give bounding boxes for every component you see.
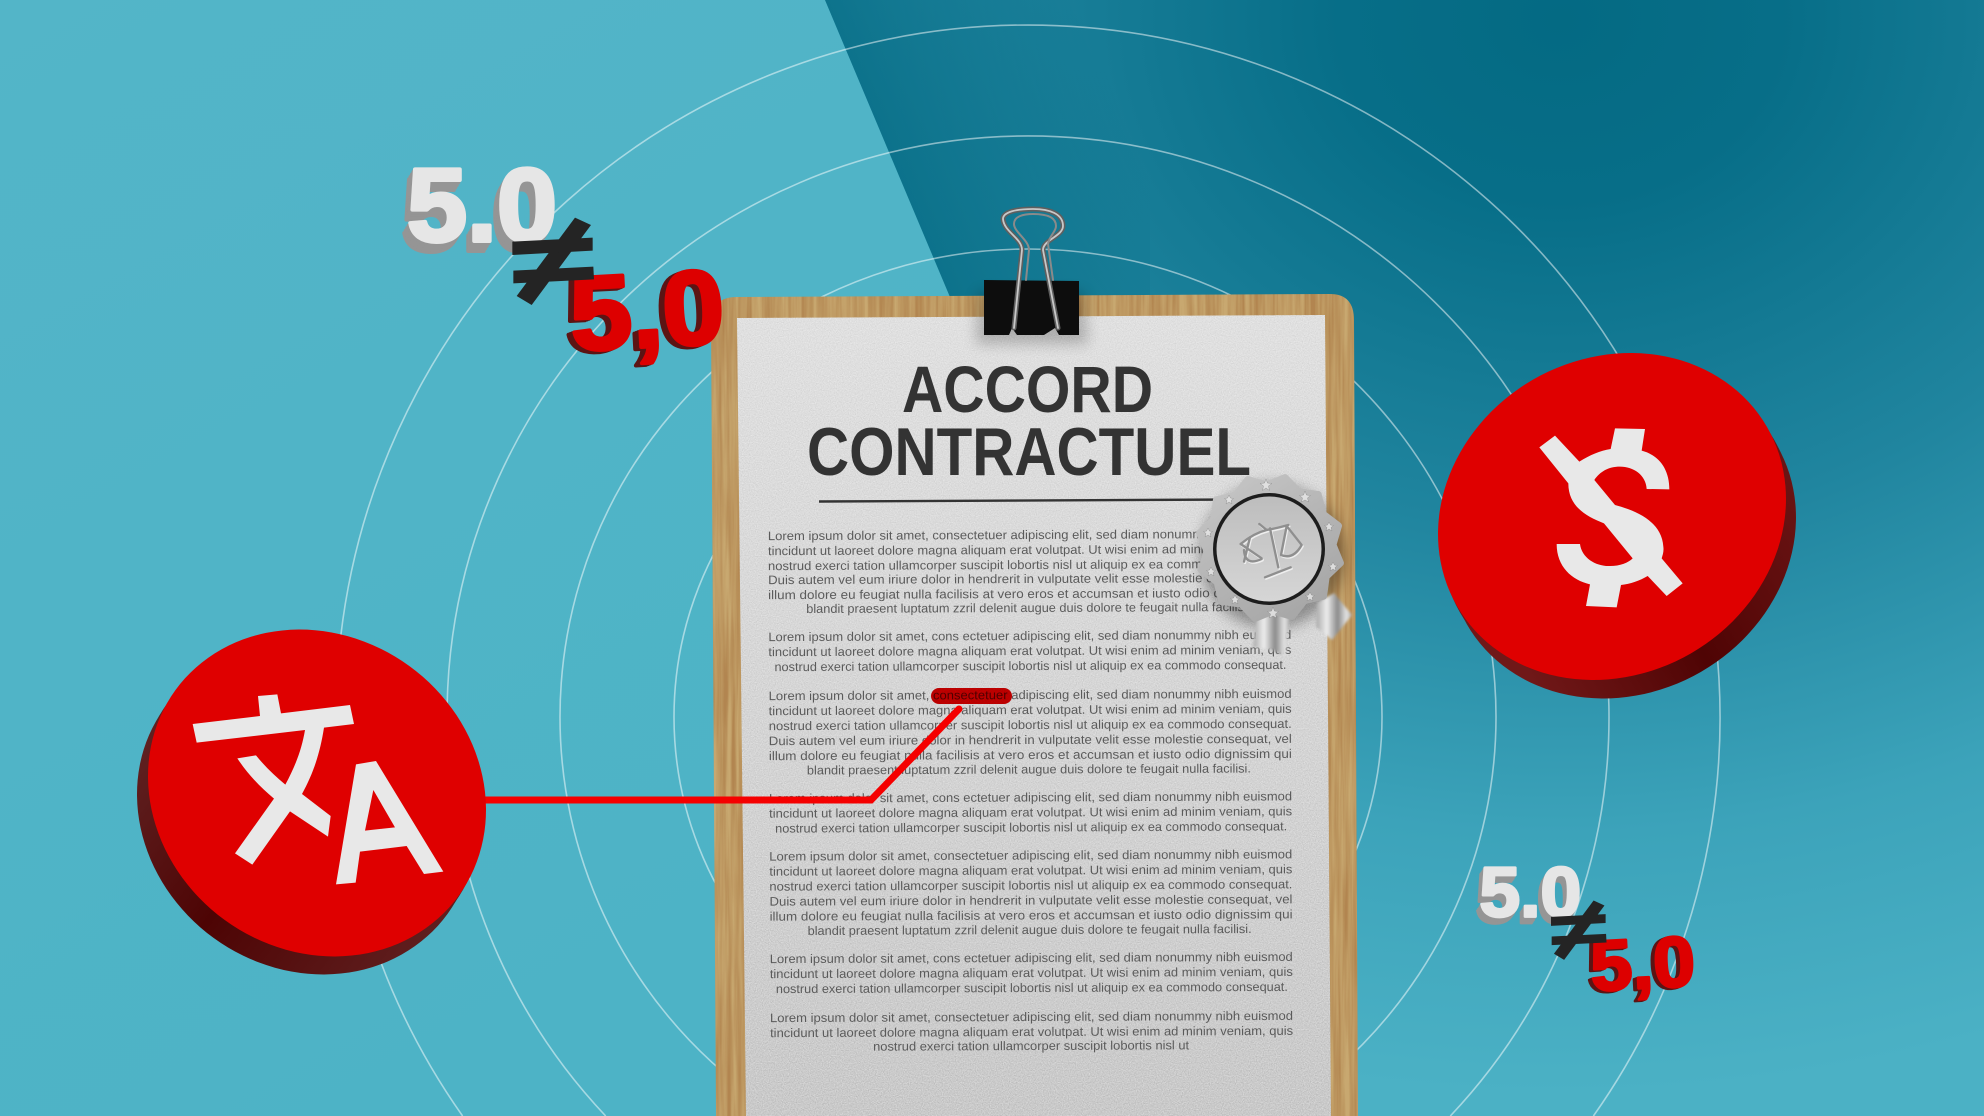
5.0 in white: 5.0 <box>1479 852 1581 931</box>
paragraph 1: illum dolore eu feugiat nulla facilisis at vero eros et accumsan et iusto odio dignissim qui <box>768 586 1291 602</box>
5.0 in white: 5.0 <box>1477 856 1579 935</box>
clipboard board <box>711 294 1358 1116</box>
icon: crossed-out dollar badge <box>1378 290 1856 761</box>
paragraph 4: Lorem ipsum dolor sit amet, cons ectetuer adipiscing elit, sed diam nonummy nibh euismod <box>769 789 1292 806</box>
paragraph 5: nostrud exerci tation ullamcorper suscipit lobortis nisl ut aliquip ex ea commodo consequat. <box>769 877 1292 894</box>
translate glyphs <box>193 694 443 884</box>
seal dark ring <box>1213 493 1325 605</box>
clip wire handle <box>1003 209 1063 328</box>
badge face <box>83 563 551 1023</box>
paragraph 3: Lorem ipsum dolor sit amet, consectetuer adipiscing elit, sed diam nonummy nibh euismod <box>769 687 1292 703</box>
5,0 in red: 5,0 <box>1584 923 1693 1008</box>
red connector line <box>470 709 959 800</box>
5.0 in white: 5.0 <box>407 148 557 264</box>
5.0 in white: 5.0 <box>1478 854 1580 933</box>
icon: translation badge <box>72 563 551 1041</box>
document title <box>807 352 1251 490</box>
paragraph 2: nostrud exerci tation ullamcorper suscipit lobortis nisl ut aliquip ex ea commodo consequat. <box>774 658 1286 674</box>
paragraph 5: Duis autem vel eum iriure dolor in hendrerit in vulputate velit esse molestie consequat, vel <box>769 892 1293 909</box>
paragraph 2: tincidunt ut laoreet dolore magna aliquam erat volutpat. Ut wisi enim ad minim veniam, quis <box>768 643 1291 659</box>
binder clip <box>976 209 1088 344</box>
paragraph 5: illum dolore eu feugiat nulla facilisis at vero eros et accumsan et iusto odio dignissim qui <box>770 907 1293 924</box>
number format comparison, large <box>401 148 727 376</box>
clipboard <box>705 209 1365 1116</box>
concentric rings <box>336 25 1720 1116</box>
paragraph 3 <box>769 687 1292 778</box>
seal shadow <box>1200 484 1344 628</box>
5.0 in white: 5.0 <box>1475 859 1577 938</box>
icon: not equal sign <box>512 218 594 305</box>
seal ribbons <box>1253 593 1352 657</box>
seal scalloped edge <box>1185 463 1355 633</box>
5.0 in white: 5.0 <box>401 158 551 274</box>
number format comparison, small <box>1475 852 1697 1008</box>
paragraph 1: blandit praesent luptatum zzril delenit augue duis dolore te feugait nulla facilisi. <box>806 600 1250 616</box>
seal face <box>1216 496 1322 602</box>
paragraph 4 <box>769 789 1292 836</box>
paragraph 3: nostrud exerci tation ullamcorper suscipit lobortis nisl ut aliquip ex ea commodo consequat. <box>769 717 1292 733</box>
badge side <box>1381 297 1856 761</box>
5,0 in red: 5,0 <box>1586 923 1694 1008</box>
paragraph 3: Duis autem vel eum iriure dolor in hendrerit in vulputate velit esse molestie consequat, vel <box>769 732 1292 748</box>
paragraph 7: Lorem ipsum dolor sit amet, consectetuer adipiscing elit, sed diam nonummy nibh euismod <box>770 1009 1293 1025</box>
dollar glyph <box>1539 428 1683 607</box>
paper sheet <box>730 310 1340 1116</box>
paragraph 5 <box>769 847 1293 938</box>
paragraph 1: nostrud exerci tation ullamcorper suscipit lobortis nisl ut aliquip ex ea commodo consequat. <box>768 557 1291 573</box>
5,0 in red: 5,0 <box>563 250 723 375</box>
paragraph 5: tincidunt ut laoreet dolore magna aliquam erat volutpat. Ut wisi enim ad minim veniam, quis <box>769 862 1292 879</box>
5,0 in red: 5,0 <box>1587 922 1696 1007</box>
paragraph 4: tincidunt ut laoreet dolore magna aliquam erat volutpat. Ut wisi enim ad minim veniam, quis <box>769 804 1292 821</box>
paragraph 2: Lorem ipsum dolor sit amet, cons ectetuer adipiscing elit, sed diam nonummy nibh euismod <box>768 628 1291 644</box>
paragraph 5: blandit praesent luptatum zzril delenit augue duis dolore te feugait nulla facilisi. <box>808 922 1252 938</box>
5.0 in white: 5.0 <box>406 150 556 266</box>
5,0 in red: 5,0 <box>567 249 727 374</box>
5,0 in red: 5,0 <box>1588 921 1697 1007</box>
paragraph 2 <box>768 628 1292 674</box>
icon: not equal sign <box>1551 901 1607 960</box>
paragraph 6: Lorem ipsum dolor sit amet, cons ectetuer adipiscing elit, sed diam nonummy nibh euismod <box>770 950 1293 966</box>
paragraph 1 <box>768 527 1291 616</box>
paragraph 6: nostrud exerci tation ullamcorper suscipit lobortis nisl ut aliquip ex ea commodo consequat. <box>776 980 1288 996</box>
seal stars <box>1204 479 1338 618</box>
paragraph 1: Lorem ipsum dolor sit amet, consectetuer adipiscing elit, sed diam nonummy nibh euismod <box>768 527 1291 543</box>
5,0 in red: 5,0 <box>565 249 725 374</box>
5.0 in white: 5.0 <box>1476 857 1578 936</box>
document title: CONTRACTUEL <box>807 414 1251 490</box>
paragraph 6: tincidunt ut laoreet dolore magna aliquam erat volutpat. Ut wisi enim ad minim veniam, quis <box>770 965 1293 981</box>
paragraph 7 <box>770 1009 1293 1054</box>
5,0 in red: 5,0 <box>561 251 721 376</box>
wedge edge shadow <box>825 0 1150 400</box>
paragraph 6 <box>770 950 1293 996</box>
5.0 in white: 5.0 <box>402 156 552 272</box>
paragraph 7: nostrud exerci tation ullamcorper suscipit lobortis nisl ut <box>873 1038 1190 1054</box>
paragraph 1: tincidunt ut laoreet dolore magna aliquam erat volutpat. Ut wisi enim ad minim veniam, quis <box>768 542 1291 558</box>
document title: ACCORD <box>902 352 1153 426</box>
clip body <box>984 280 1079 335</box>
paragraph 4: nostrud exerci tation ullamcorper suscipit lobortis nisl ut aliquip ex ea commodo consequat. <box>775 819 1287 836</box>
contract body text <box>768 527 1293 1054</box>
paragraph 7: tincidunt ut laoreet dolore magna aliquam erat volutpat. Ut wisi enim ad minim veniam, quis <box>770 1024 1293 1040</box>
badge side <box>72 570 547 1041</box>
badge face <box>1378 290 1846 743</box>
title rule <box>819 500 1240 502</box>
paragraph 3: blandit praesent luptatum zzril delenit augue duis dolore te feugait nulla facilisi. <box>807 762 1251 777</box>
background: dark teal wedge <box>825 0 1984 1116</box>
highlighted word <box>931 688 1012 704</box>
paragraph 3: illum dolore eu feugiat nulla facilisis at vero eros et accumsan et iusto odio dignissim qui <box>769 747 1292 763</box>
wax seal with scales of justice <box>1185 463 1355 657</box>
5.0 in white: 5.0 <box>404 153 554 269</box>
icon: scales of justice <box>1241 524 1303 579</box>
paragraph 1: Duis autem vel eum iriure dolor in hendrerit in vulputate velit esse molestie consequat, vel <box>768 571 1291 587</box>
paragraph 5: Lorem ipsum dolor sit amet, consectetuer adipiscing elit, sed diam nonummy nibh euismod <box>769 847 1292 864</box>
paragraph 3: tincidunt ut laoreet dolore magna aliquam erat volutpat. Ut wisi enim ad minim veniam, quis <box>769 702 1292 718</box>
